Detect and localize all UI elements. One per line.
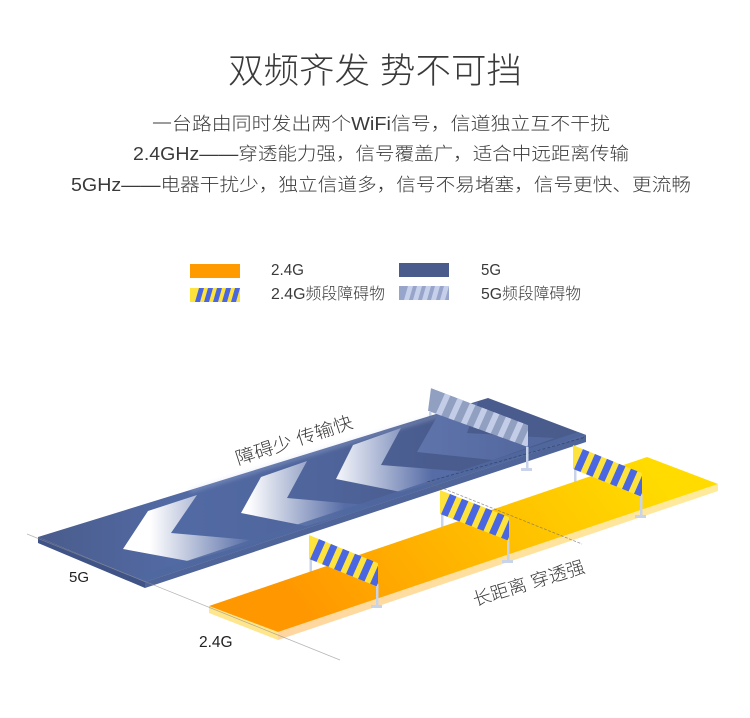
title: 双频齐发 势不可挡 <box>228 52 522 91</box>
obstacle: 2.4G barricade middle <box>440 490 516 563</box>
pole <box>640 494 642 516</box>
board <box>428 388 528 447</box>
foot <box>521 468 532 471</box>
legend swatch: 2.4G obstacle <box>190 288 240 302</box>
description text block: 一台路由同时发出两个WiFi信号，信道独立互不干扰 <box>152 114 610 134</box>
band label: 2.4G: 2.4G <box>199 634 233 651</box>
2.4G band surface <box>209 457 718 632</box>
2.4G band front side <box>278 484 718 640</box>
board <box>573 445 642 497</box>
description text block: 2.4GHz——穿透能力强，信号覆盖广，适合中远距离传输 <box>133 144 629 164</box>
left poles behind bands <box>310 412 576 573</box>
caption: 2.4G band: 长距离 穿透强 <box>470 557 587 610</box>
2.4G band <box>209 457 718 640</box>
guide line: back <box>427 482 582 544</box>
chevron 1 <box>123 495 262 561</box>
5G band edge strip <box>135 432 586 582</box>
legend <box>190 262 581 303</box>
chevrons <box>123 402 555 561</box>
foot <box>371 605 382 608</box>
description text block: 5GHz——电器干扰少，独立信道多，信号不易堵塞，信号更快、更流畅 <box>71 175 691 195</box>
obstacle: 2.4G barricade near <box>309 535 386 608</box>
board <box>309 535 378 587</box>
chevron 5 <box>467 433 555 450</box>
5G band dashed edge <box>427 437 586 482</box>
legend label: 5G: 5G <box>481 262 501 279</box>
description text block <box>71 114 691 195</box>
5G band left side <box>38 537 145 588</box>
5G band <box>38 398 586 588</box>
legend swatch: 5G obstacle <box>399 286 449 300</box>
foot <box>502 560 513 563</box>
foot <box>635 515 646 518</box>
legend swatch: 5G <box>399 263 449 277</box>
chevron 3 <box>336 428 470 492</box>
guide line: front <box>27 534 340 660</box>
band label: 5G: 5G <box>69 569 89 586</box>
5G band front side <box>145 435 586 588</box>
obstacle: 2.4G barricade far <box>573 445 650 518</box>
top edge glow <box>190 415 440 491</box>
legend swatch: 2.4G <box>190 264 240 278</box>
2.4G band left side <box>209 606 278 640</box>
obstacle: 5G barricade <box>425 386 536 471</box>
pole <box>507 539 510 561</box>
legend label: 2.4G obstacle: 2.4G频段障碍物 <box>271 285 385 303</box>
pole <box>526 447 528 469</box>
legend label: 2.4G: 2.4G <box>271 262 304 279</box>
caption: 5G band: 障碍少 传输快 <box>233 412 355 469</box>
chevron 4 <box>417 402 555 460</box>
legend label: 5G obstacle: 5G频段障碍物 <box>481 285 581 303</box>
chevron 2 <box>241 461 378 526</box>
pole <box>376 584 378 606</box>
5G band surface <box>38 398 586 582</box>
board <box>440 490 509 541</box>
